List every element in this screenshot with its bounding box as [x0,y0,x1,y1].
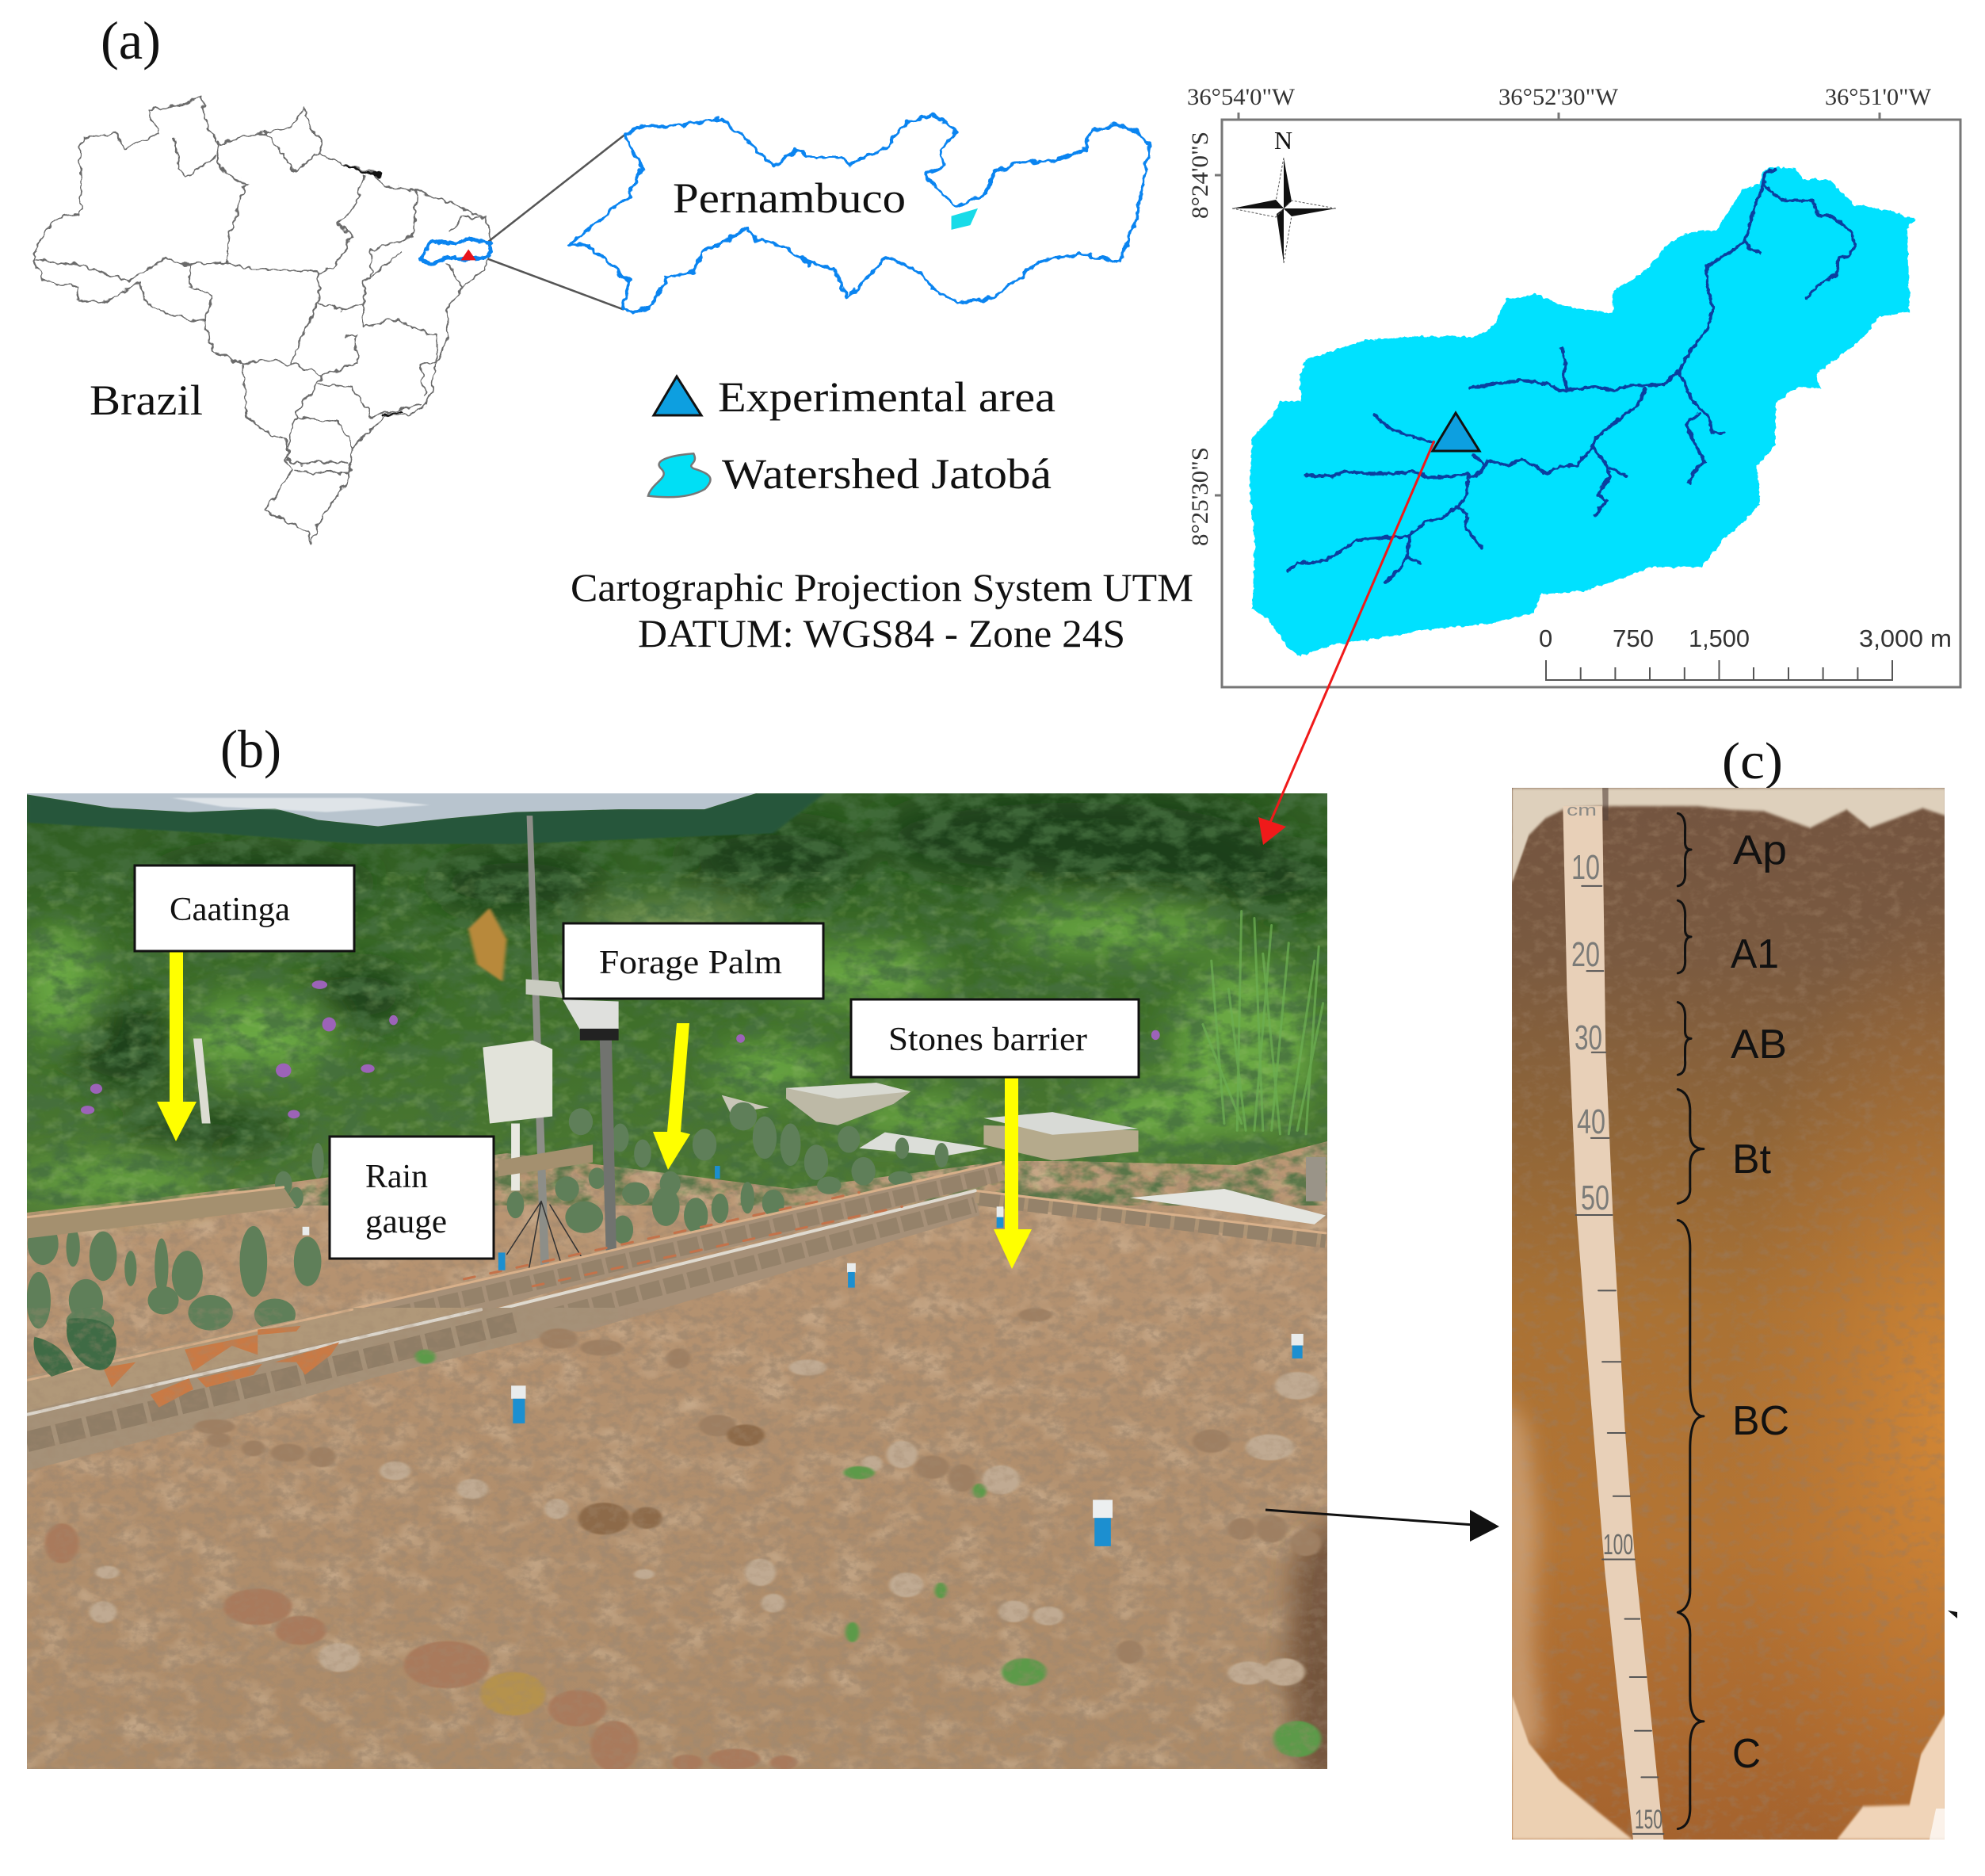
photo: soil profile [1499,788,1945,1840]
stones and small plants [44,1309,1321,1771]
weather station [193,816,619,1286]
concrete tanks and sheets [722,1083,1326,1225]
cactus plants (forage palm) [27,1102,949,1335]
text: cartographic projection: Cartographic Projection System UTM [571,565,1193,609]
icon: north arrow compass: N [1274,126,1292,155]
arrow: Forage Palm [653,1023,690,1170]
connector lines: zoom into Pernambuco [489,134,625,309]
soil horizon braces [1678,813,1704,1828]
callout: Caatinga: Caatinga [170,892,290,928]
tape numerals: 20 [1571,935,1600,974]
legend: watershed Jatobá: Watershed Jatobá [722,450,1052,498]
brick walls top section [27,1144,1326,1332]
tape numerals: 150 [1635,1805,1662,1835]
pit left wall shading [1499,1391,1542,1768]
sand corners [1512,1696,1633,1840]
scale bar: 750 [1613,625,1654,652]
icon: north arrow compass [1232,126,1336,263]
tall grass clump [1203,911,1323,1134]
label: Pernambuco: Pernambuco [673,174,906,222]
flowers [81,980,1160,1118]
soil horizon labels: C [1732,1731,1761,1777]
orange shrub [468,907,507,982]
ground grain over stones [27,1308,1327,1769]
vegetation light and shade masses [17,791,1349,1198]
callout: Caatinga [135,865,354,951]
tape numerals: 50 [1581,1179,1609,1217]
measuring tape [1563,806,1663,1840]
small black mark beside soil photo [1948,1610,1957,1618]
arrow: field photo to soil profile [1265,1510,1499,1542]
legend: experimental area: Experimental area [718,373,1055,421]
callout: Forage Palm: Forage Palm [599,945,782,981]
heading: panel c: (c) [1722,732,1783,790]
surface band [1512,788,1945,882]
callout: Rain gauge: gauge [365,1204,447,1240]
soil horizon labels: Bt [1732,1137,1772,1183]
map: watershed frame and ticks [1215,113,1960,687]
soil horizon labels: AB [1731,1022,1787,1068]
brick walls lower section [27,1308,619,1471]
scale bar: 0 [1539,625,1552,652]
heading: panel b: (b) [220,719,281,779]
scale bar: 3,000 m [1859,625,1952,652]
scale bar: 1,500 [1689,625,1750,652]
map: mini Pernambuco locator [421,239,491,265]
label: Brazil: Brazil [90,376,203,424]
scale bar [1539,625,1952,680]
coordinate labels: 36°51'0"W [1825,84,1932,110]
callout: Stones barrier [851,999,1139,1077]
text: cartographic projection [571,565,1193,655]
coordinate labels: 8°24'0"S [1187,132,1213,219]
heading: panel a: (a) [101,10,161,71]
tape numerals: 30 [1575,1018,1602,1057]
coordinate labels: 8°25'30"S [1187,447,1213,546]
coordinate labels [1187,84,1932,546]
vegetation hillside [17,791,1349,1213]
coordinate labels: 36°52'30"W [1498,84,1619,110]
tape numerals: 10 [1571,848,1600,887]
map: river network [1288,169,1855,583]
callout: Rain gauge: Rain [365,1159,428,1195]
soil horizon labels: A1 [1731,931,1779,977]
photo: experimental field plots [17,791,1349,1783]
callout: Rain gauge [330,1137,494,1259]
arrow: Stones barrier [994,1078,1032,1269]
arrow: watershed to field photo [1258,441,1434,845]
soil horizon labels: BC [1732,1398,1789,1444]
sky and distant hills [27,793,825,844]
map marker: experimental area triangle [1433,413,1479,451]
text: cartographic projection: DATUM: WGS84 - Zone 24S [638,611,1125,655]
soil horizon labels: Ap [1733,827,1787,873]
soil horizon labels [1731,827,1789,1777]
dark soil along right edge [1273,1505,1327,1769]
coordinate labels: 36°54'0"W [1187,84,1296,110]
callout: Stones barrier: Stones barrier [888,1022,1087,1058]
tape numerals: 100 [1603,1528,1633,1561]
soil moisture access tubes [511,1334,1304,1546]
map: Pernambuco state outline [570,114,1150,313]
callout: Forage Palm [563,923,823,999]
tape numerals: 40 [1577,1102,1605,1141]
map: Brazil states outline [32,97,491,544]
tape numerals [1567,802,1662,1835]
tape numerals: cm [1567,802,1597,820]
map: Jatobá watershed polygon [1250,167,1915,656]
arrow: Caatinga [157,950,197,1141]
